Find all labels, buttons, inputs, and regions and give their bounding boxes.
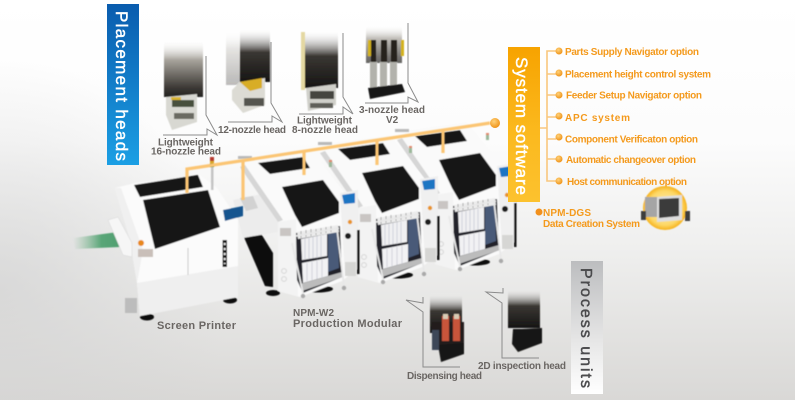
label: lightweight 8-nozzle head: 8-nozzle head [292,125,358,136]
label: lightweight 16-nozzle head [151,138,221,158]
panel: process units title [571,261,603,394]
panel: system software title [508,47,540,202]
bracket: software options [540,51,556,181]
rail end ball [490,118,500,128]
label: dispensing head: Dispensing head [407,371,482,382]
label: 12-nozzle head: 12-nozzle head [218,125,286,136]
machine: NPM-W2 module 3 [395,122,516,271]
list: software options: Placement height control system [565,70,711,80]
machine: screen printer [73,157,243,320]
text: NPM-DGS data creation system: Data Creation System [543,219,640,230]
orange connection rail [187,123,490,200]
label: 3-nozzle head V2: V2 [386,115,399,126]
label: screen printer: Screen Printer [157,320,237,332]
icon: 2D inspection head [508,288,542,352]
text: NPM-DGS data creation system: NPM-DGS [543,208,591,219]
list: software options: Component Verificaton option [565,134,698,146]
icon: lightweight 16-nozzle head [164,40,203,130]
leader lines: placement heads [163,23,418,135]
icon: lightweight 8-nozzle head [301,30,338,111]
list: software options: Automatic changeover option [566,155,696,166]
label: lightweight 8-nozzle head: Lightweight [297,116,353,126]
list: software options [556,47,711,188]
list: software options: Parts Supply Navigator option [565,47,699,58]
machine: NPM-W2 module 1 [233,149,360,298]
icon: dispensing head [430,293,464,362]
list: software options: Host communication option [567,177,687,188]
icon: 12-nozzle head [226,28,270,113]
panel: placement heads title: Placement heads [112,11,131,161]
label: 3-nozzle head V2 [359,105,425,126]
label: NPM-W2 production modular: Production Modular [293,318,403,330]
green circuit board [73,232,120,249]
label: NPM-W2 production modular: NPM-W2 [293,308,334,319]
label: lightweight 8-nozzle head [292,116,358,136]
icon: 3-nozzle head V2 [366,25,405,99]
list: software options: Feeder Setup Navigator option [566,90,702,102]
panel: placement heads title [107,4,139,165]
leader lines: process units [406,288,539,367]
machine: NPM-W2 module 2 [318,135,440,284]
label: 2D inspection head: 2D inspection head [478,361,566,372]
label: 3-nozzle head V2: 3-nozzle head [359,105,425,116]
icon: computer in yellow disc [641,186,690,230]
text: NPM-DGS data creation system [536,208,640,230]
label: lightweight 16-nozzle head: Lightweight [158,138,214,148]
label: lightweight 16-nozzle head: 16-nozzle head [151,146,221,158]
panel: process units title: Process units [577,268,594,388]
label: NPM-W2 production modular [293,308,403,330]
panel: system software title: System software [512,57,531,195]
list: software options: APC system [565,113,630,124]
